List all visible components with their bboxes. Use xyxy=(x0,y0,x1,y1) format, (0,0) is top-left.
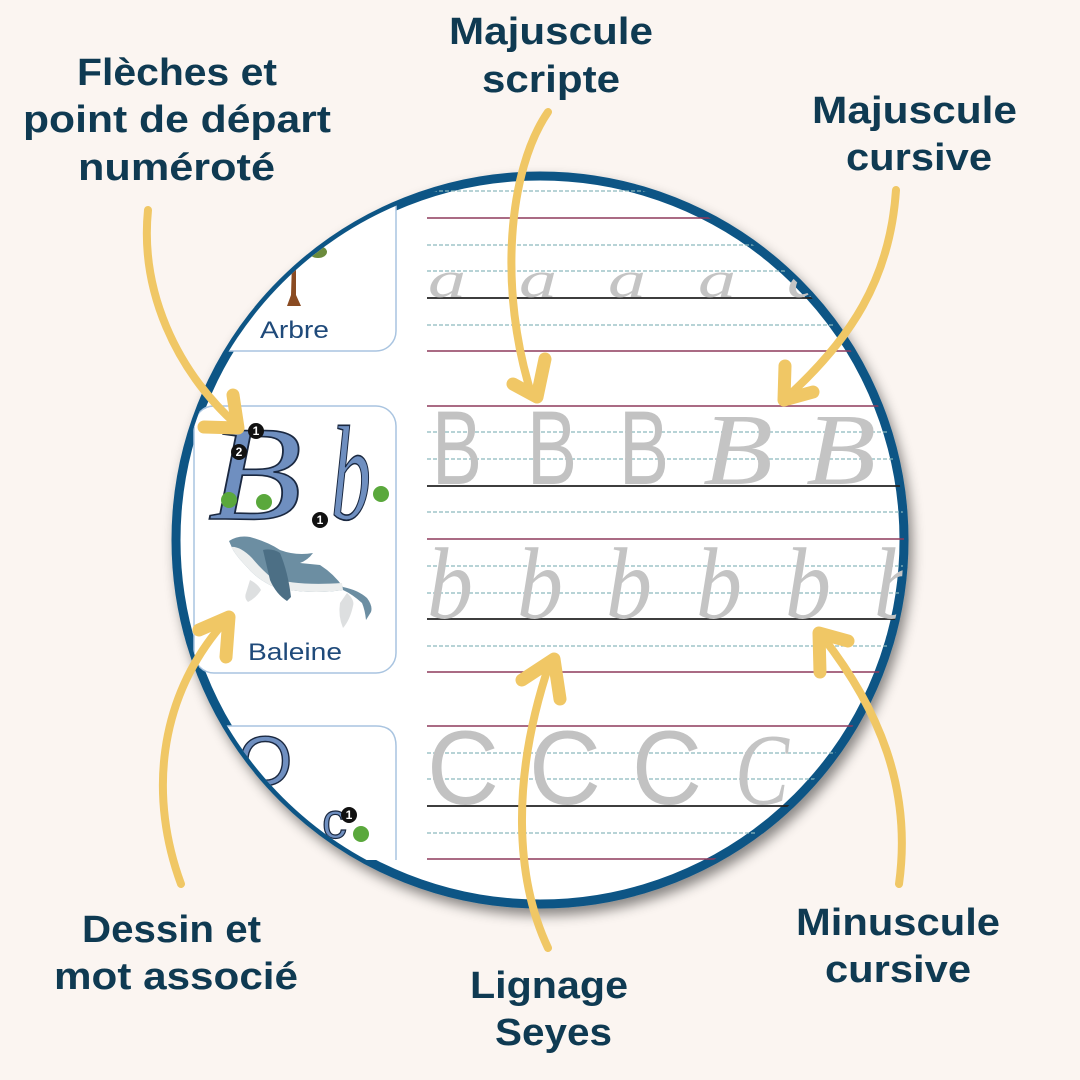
arrow: Majuscule scripte xyxy=(511,112,548,397)
illustration: whale xyxy=(229,536,372,628)
row: capital C tracing: C xyxy=(529,710,601,827)
row: letter a tracing: a xyxy=(519,252,557,309)
markers: numbered starts and green end dots: 1 xyxy=(317,513,324,527)
arrow: Minuscule cursive xyxy=(819,633,902,884)
heading: Flèches et point de départ numéroté: point de départ xyxy=(23,99,331,141)
heading: Majuscule scripte: Majuscule xyxy=(449,11,653,53)
heading: Lignage Seyes xyxy=(470,965,628,1054)
heading: Minuscule cursive xyxy=(796,902,1000,991)
heading: Dessin et mot associé: mot associé xyxy=(54,956,298,998)
heading: Flèches et point de départ numéroté: numéroté xyxy=(78,147,275,189)
arrow: Lignage Seyes xyxy=(522,659,560,948)
arrow: Flèches et point de départ xyxy=(147,210,238,428)
panel: magnifier circle xyxy=(150,140,920,904)
row: lowercase b tracing: b xyxy=(606,528,652,641)
row: capital C tracing: C xyxy=(735,714,790,827)
row: capital B tracing: B xyxy=(703,394,773,507)
heading: Lignage Seyes: Lignage xyxy=(470,965,628,1007)
heading: Dessin et mot associé: Dessin et xyxy=(82,909,261,951)
row: letter a tracing: a xyxy=(698,252,736,309)
row: capital B tracing: B xyxy=(432,390,482,507)
row: lowercase b tracing: b xyxy=(427,528,473,641)
letters: cursive C and c xyxy=(242,736,346,840)
arrow: Dessin et mot associé xyxy=(163,617,229,884)
row: lowercase b tracing: b xyxy=(785,528,831,641)
arrow: Majuscule cursive xyxy=(784,190,896,400)
markers: numbered starts and green end dots: 2 xyxy=(236,445,243,459)
heading: Majuscule scripte: scripte xyxy=(482,59,620,101)
row: lowercase b tracing: b xyxy=(517,528,563,641)
icon: tree xyxy=(287,246,327,306)
heading: Majuscule scripte xyxy=(449,11,653,101)
row: letter a tracing: a xyxy=(428,252,466,309)
heading: Minuscule cursive: Minuscule xyxy=(796,902,1000,944)
letters: cursive C and c: c xyxy=(322,793,347,849)
row: capital B tracing: B xyxy=(527,390,577,507)
letters: cursive B and b: B xyxy=(208,400,302,549)
heading: Minuscule cursive: cursive xyxy=(825,949,971,991)
heading: Flèches et point de départ numéroté xyxy=(23,52,331,189)
letters: cursive B and b xyxy=(208,424,370,522)
card: Arbre xyxy=(228,206,397,352)
heading: Flèches et point de départ numéroté: Flèches et xyxy=(77,52,277,94)
row: capital C tracing: C xyxy=(427,710,499,827)
markers: numbered starts and green end dots: 1 xyxy=(253,424,260,438)
row: lowercase b tracing: b xyxy=(696,528,742,641)
markers: start and end dots: 1 xyxy=(346,808,353,822)
row: capital B tracing: B xyxy=(619,390,669,507)
heading: Lignage Seyes: Seyes xyxy=(495,1012,612,1054)
row: capital B tracing: B xyxy=(806,394,876,507)
heading: Majuscule cursive: cursive xyxy=(846,137,992,179)
heading: Majuscule cursive: Majuscule xyxy=(812,90,1017,132)
row: capital B tracing xyxy=(438,412,874,484)
row: capital C tracing xyxy=(432,730,790,805)
row: capital C tracing: C xyxy=(632,710,702,827)
heading: Majuscule cursive xyxy=(812,90,1017,179)
label: Arbre: Arbre xyxy=(260,317,329,344)
row: letter a tracing xyxy=(430,272,811,298)
markers: numbered starts and green end dots xyxy=(221,423,389,528)
row: letter a tracing: a xyxy=(608,252,646,309)
markers: start and end dots xyxy=(341,807,369,842)
letters: cursive B and b: b xyxy=(331,400,371,549)
card: third letter C xyxy=(226,725,397,860)
row: lowercase b tracing xyxy=(430,547,903,619)
row: letter a tracing: a xyxy=(787,252,825,309)
card: Baleine xyxy=(194,400,396,673)
letters: cursive C and c: O xyxy=(238,722,292,800)
row: lowercase b tracing: b xyxy=(874,528,920,641)
label: Baleine: Baleine xyxy=(248,639,342,666)
heading: Dessin et mot associé xyxy=(54,909,298,998)
